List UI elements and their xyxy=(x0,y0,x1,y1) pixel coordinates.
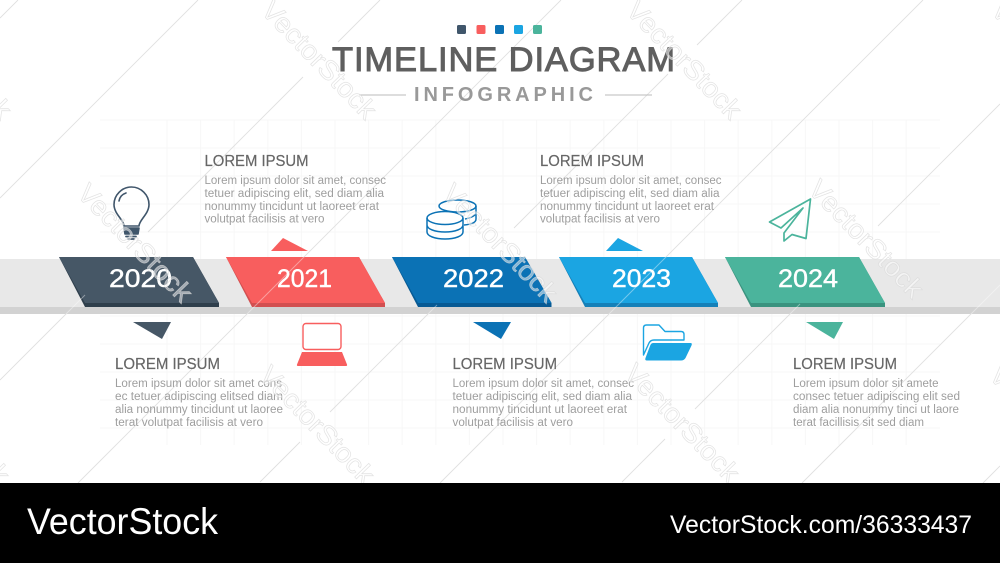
pointer xyxy=(473,322,511,339)
text block 2022: nonummy tincidunt ut laoreet erat xyxy=(452,404,628,416)
text block 2021: LOREM IPSUM xyxy=(204,153,308,170)
milestone 2024 xyxy=(725,199,960,429)
text block 2021: tetuer adipiscing elit, sed diam alia xyxy=(204,188,385,200)
text block 2022: tetuer adipiscing elit, sed diam alia xyxy=(452,391,633,403)
text block 2024: Lorem ipsum dolor sit amete xyxy=(793,378,938,390)
milestone 2021 xyxy=(204,153,386,366)
year tag 2020 xyxy=(59,257,219,307)
year tag 2024 xyxy=(725,257,885,307)
text block 2024: diam alia nonummy tinci ut laore xyxy=(793,404,959,416)
year tag 2020: 2020 xyxy=(109,265,172,293)
text block 2022: Lorem ipsum dolor sit amet, consec xyxy=(452,378,634,390)
icon: folder xyxy=(644,325,692,360)
heading: TIMELINE DIAGRAM xyxy=(332,41,675,79)
pointer xyxy=(806,322,843,339)
pointer xyxy=(133,322,171,339)
text block 2023: LOREM IPSUM xyxy=(540,153,644,170)
text block 2021: Lorem ipsum dolor sit amet, consec xyxy=(204,175,386,187)
year tag 2024: 2024 xyxy=(778,265,838,293)
text block 2020: terat volutpat facilisis at vero xyxy=(115,417,263,429)
pointer xyxy=(606,238,643,251)
text block 2021 xyxy=(204,153,386,226)
timeline bar xyxy=(0,259,1000,314)
footer band xyxy=(0,483,1000,563)
text block 2024: terat facillisis sit sed diam xyxy=(793,417,924,429)
text block 2021: nonummy tincidunt ut laoreet erat xyxy=(204,201,380,213)
icon: light bulb xyxy=(114,187,149,239)
text block 2020: LOREM IPSUM xyxy=(115,356,220,373)
milestone 2020 xyxy=(59,187,283,429)
year tag 2022 xyxy=(392,257,552,307)
text block 2022 xyxy=(452,356,634,429)
year tag 2022: 2022 xyxy=(443,265,504,293)
watermarks: VectorStock xyxy=(253,360,381,490)
year tag 2023 xyxy=(559,257,718,307)
text block 2022: volutpat facilisis at vero xyxy=(452,417,573,429)
milestone 2023 xyxy=(540,153,722,360)
watermarks: VectorStock xyxy=(618,358,746,488)
text block 2023: volutpat facilisis at vero xyxy=(540,214,660,226)
pointer xyxy=(271,238,308,251)
watermarks: VectorStock xyxy=(436,178,564,308)
text block 2020: ec tetuer adipiscing elitsed diam xyxy=(115,391,283,403)
subheading: INFOGRAPHIC xyxy=(414,84,593,106)
icon: coins xyxy=(427,200,476,239)
watermarks: VectorStock xyxy=(802,174,930,304)
text block 2024: consec tetuer adipiscing elit sed xyxy=(793,391,960,403)
milestone 2022 xyxy=(392,200,634,429)
colour squares xyxy=(457,25,542,34)
title header xyxy=(332,25,675,106)
text block 2023: Lorem ipsum dolor sit amet, consec xyxy=(540,175,722,187)
year tag 2023: 2023 xyxy=(612,265,671,293)
icon: laptop xyxy=(297,324,347,366)
text block 2023: tetuer adipiscing elit, sed diam alia xyxy=(540,188,720,200)
footer logo: VectorStock xyxy=(27,501,218,542)
footer url: VectorStock.com/36333437 xyxy=(670,511,972,539)
year tag 2021 xyxy=(226,257,385,307)
text block 2020: alia nonummy tincidunt ut laoree xyxy=(115,404,283,416)
text block 2022: LOREM IPSUM xyxy=(452,356,557,373)
watermarks: VectorStock xyxy=(71,178,199,308)
text block 2020: Lorem ipsum dolor sit amet cons xyxy=(115,378,282,390)
text block 2021: volutpat facilisis at vero xyxy=(204,214,324,226)
text block 2024: LOREM IPSUM xyxy=(793,356,897,373)
year tag 2021: 2021 xyxy=(277,265,332,293)
text block 2020 xyxy=(115,356,283,429)
text block 2023 xyxy=(540,153,722,226)
text block 2024 xyxy=(793,356,960,429)
text block 2023: nonummy tincidunt ut laoreet erat xyxy=(540,201,715,213)
icon: paper plane xyxy=(770,199,810,241)
